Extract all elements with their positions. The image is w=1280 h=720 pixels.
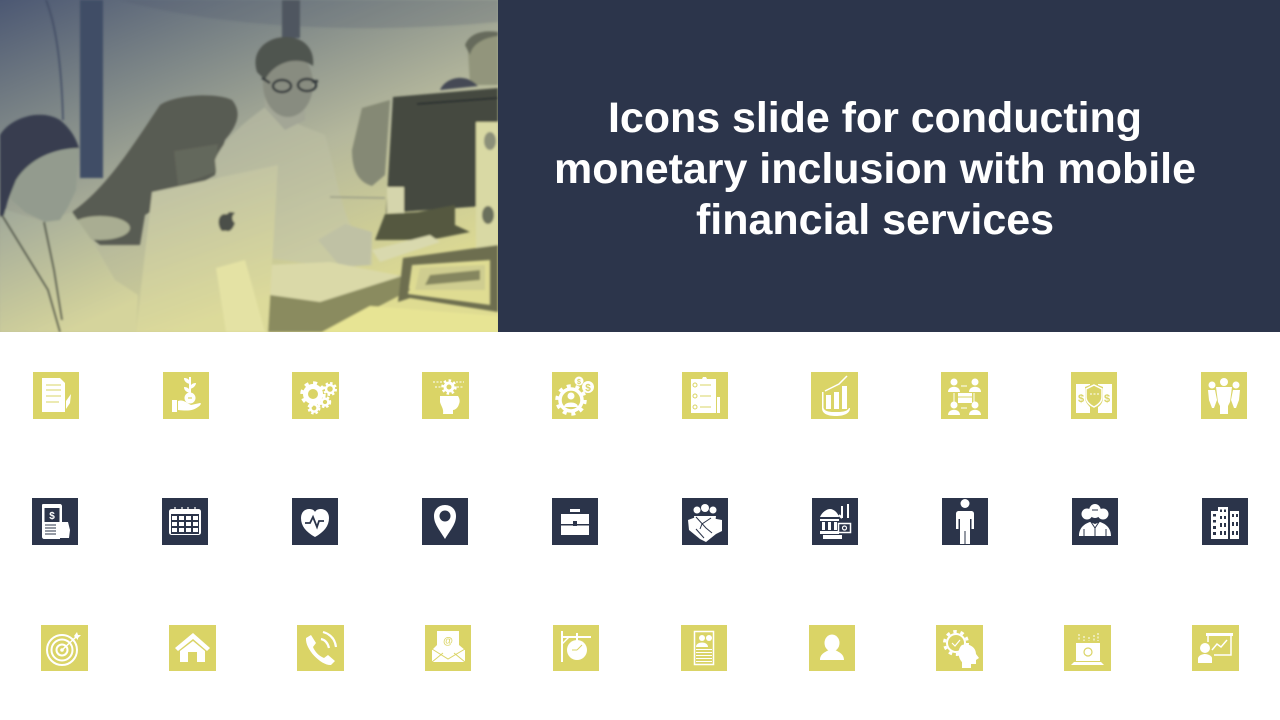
icon: gear with person and coins: $ bbox=[585, 383, 591, 394]
icon: house bbox=[169, 625, 216, 671]
icon: laptop with signals bbox=[1064, 625, 1111, 671]
iMac stand bbox=[216, 260, 265, 332]
icon: briefcase bbox=[552, 498, 598, 545]
woman hair bbox=[0, 115, 79, 217]
icon: phones with shield: $ bbox=[1104, 393, 1110, 405]
pillar right bbox=[282, 0, 300, 38]
icon: bank and cash bbox=[812, 498, 858, 545]
man hair bbox=[255, 37, 313, 80]
title: financial services bbox=[696, 196, 1054, 244]
photo: office workers at computers bbox=[0, 0, 498, 332]
icon: mobile payment with hand: $ bbox=[49, 511, 55, 522]
title: Icons slide for conducting bbox=[608, 94, 1142, 142]
icon: phone call bbox=[297, 625, 344, 671]
icon: phones with shield: $ bbox=[1078, 393, 1084, 405]
title: monetary inclusion with mobile bbox=[554, 145, 1196, 193]
title panel bbox=[498, 0, 1280, 332]
icon row 2: navy bbox=[32, 498, 1248, 545]
chair back bbox=[175, 145, 217, 184]
chair bbox=[68, 95, 238, 245]
icon: calendar bbox=[162, 498, 208, 545]
icon: mobile payment with hand bbox=[32, 498, 78, 545]
title bbox=[554, 94, 1196, 244]
icon: checklist clipboard bbox=[682, 372, 728, 419]
right person head bbox=[468, 32, 498, 85]
woman lanyard bbox=[0, 212, 62, 332]
foreground paper bbox=[322, 304, 380, 332]
icon: profile document bbox=[681, 625, 727, 671]
icon: heart with pulse bbox=[292, 498, 338, 545]
icon: plant and coin in hand bbox=[163, 372, 209, 419]
man shirt bbox=[214, 108, 348, 262]
riser bbox=[398, 245, 498, 312]
icon: growth chart on coins bbox=[811, 372, 858, 419]
keyboard bbox=[372, 235, 440, 262]
icon: head with gear bbox=[936, 625, 983, 671]
partition bbox=[330, 197, 385, 198]
icon: gear with person and coins: $ bbox=[577, 379, 581, 386]
icon: gear with person and coins bbox=[552, 372, 598, 419]
man glasses bbox=[262, 78, 318, 92]
monitor stand bbox=[375, 205, 470, 240]
icon: three people bbox=[1201, 372, 1247, 419]
woman body bbox=[0, 208, 138, 332]
icon: standing person bbox=[942, 498, 988, 545]
iMac bbox=[136, 165, 278, 332]
pillar left bbox=[80, 0, 103, 178]
icon: gears bbox=[292, 372, 339, 419]
papers bbox=[263, 262, 402, 302]
icon: email envelope bbox=[425, 625, 471, 671]
icon: office buildings bbox=[1202, 498, 1248, 545]
icon: document with pen bbox=[33, 372, 79, 419]
side table bbox=[70, 216, 130, 240]
icon: phones with shield bbox=[1071, 372, 1117, 419]
woman face bbox=[10, 148, 78, 222]
man neck bbox=[266, 106, 297, 130]
icon row 1: yellow bbox=[33, 372, 1247, 419]
icon row 3: yellow bbox=[41, 625, 1239, 671]
man face bbox=[263, 62, 313, 118]
icon: head with gear bbox=[422, 372, 469, 419]
icon: team network with briefcase bbox=[941, 372, 988, 419]
icon: target with arrow bbox=[41, 625, 88, 671]
right monitor bbox=[386, 88, 498, 213]
icon: email envelope: @ bbox=[443, 636, 453, 647]
icon: handshake with team bbox=[682, 498, 728, 545]
man hands bbox=[322, 226, 372, 264]
cable bbox=[46, 0, 63, 120]
icon: location pin bbox=[422, 498, 468, 545]
icon: hanging clock sign bbox=[553, 625, 599, 671]
icon: presenter with chart bbox=[1192, 625, 1239, 671]
desk bbox=[262, 275, 410, 332]
icon: team of professionals bbox=[1072, 498, 1118, 545]
white tower bbox=[476, 122, 498, 248]
hanging coat bbox=[352, 100, 390, 186]
icon: person avatar bbox=[809, 625, 855, 671]
